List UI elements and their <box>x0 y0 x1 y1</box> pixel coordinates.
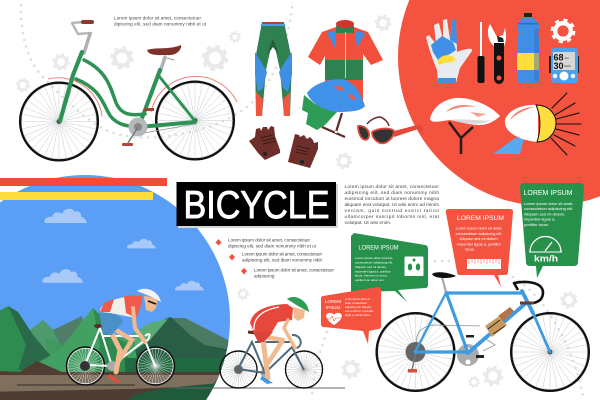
callout: small red heart: LOREM <box>325 299 341 304</box>
text: top block: dipiscing elit, sed diam nonummy nibh et ut <box>114 22 207 26</box>
callout: far right green speed: Lorem ipsum dolor sit amet, <box>524 201 573 206</box>
icon: cycling jersey <box>308 20 383 100</box>
callout: middle green weight: LOREM IPSUM <box>358 246 398 252</box>
ground lines <box>17 385 345 388</box>
callout: middle green weight: consectetuer adipiscing elit. <box>355 260 393 264</box>
text: main paragraph: Lorem ipsum dolor sit amet, consectetuer <box>344 184 439 190</box>
icon: bike computer <box>549 48 579 83</box>
text: main paragraph <box>344 184 440 226</box>
icon: glove with yellow palm <box>426 19 472 83</box>
callout: middle green weight: lacus. Aenean eu tortor, <box>355 274 388 278</box>
panel: landscape scene <box>0 170 240 400</box>
mountains <box>0 306 240 400</box>
callout: far right green speed: consectetuer adipiscing elit. <box>524 206 573 211</box>
callout: small red heart: ligula a, porttitor lacus. <box>345 313 371 317</box>
callout: middle red length <box>446 209 513 287</box>
icon: water bottle <box>517 13 539 83</box>
bullet list: Lorem ipsum dolor sit amet, consectetuer <box>228 238 310 242</box>
callout: middle red length: consectetuer adipiscing elit. <box>456 232 502 236</box>
icon: bike lamp <box>493 93 581 155</box>
green bicycle <box>20 22 237 160</box>
text: main paragraph: adipiscing elit, sed diam nonummy nibh <box>344 190 439 196</box>
text: main paragraph: volutpat. Ut wisi enim. <box>344 220 391 226</box>
callout: middle red length: imperdiet ligula a, porttitor <box>457 242 502 246</box>
colour bars <box>0 178 167 200</box>
blue bicycle <box>377 272 589 391</box>
callout: small red heart: adipiscing elit. Aliquam <box>345 305 371 309</box>
callout: small red heart: sed mi dictum, Imperdiet <box>345 309 374 313</box>
icon: bike computer: 68 <box>554 52 564 62</box>
callout: middle green weight: eleifend ac dolor non. <box>355 278 385 282</box>
bullet list: adipiscing elit, sed diam nonummy nibh <box>242 258 322 262</box>
icon: fingerless gloves <box>249 126 318 168</box>
text: main paragraph: ullamcorper suscipit lobortis nisl, erat <box>344 214 440 220</box>
icon: white helmet <box>430 98 500 154</box>
text: main paragraph: euismod tincidunt ut laoreet dolore magna <box>344 196 439 202</box>
callout: small red heart: Lorem ipsum dolor sit <box>345 297 370 301</box>
cyclist in landscape <box>66 289 174 385</box>
text: main paragraph: aliquam erat volutpat. Ut wisi enim ad minim <box>344 202 439 208</box>
bullet list: dipiscing elit, sed diam nonummy nibh et ut <box>228 244 317 248</box>
callout: far right green speed: km/h <box>534 254 558 264</box>
icon: bike computer: 30 <box>554 61 564 71</box>
text: main paragraph: veniam, quis nostrud exerci tation <box>344 208 439 214</box>
callout: far right green speed: imperdiet ligula a, <box>524 216 555 222</box>
icon: blue helmet <box>302 79 365 137</box>
cyclist on white <box>220 297 322 388</box>
icon: wrench <box>488 24 506 84</box>
icon: bike computer: km/h <box>564 64 571 68</box>
callout: small red heart <box>321 287 381 344</box>
callout: far right green speed: Aliquam sed mi dictum, <box>524 212 565 216</box>
callout: middle green weight: Aliquam sed mi dictum, <box>355 265 387 269</box>
bullet list: Lorem ipsum dolor sit amet, consectetuer <box>254 268 334 272</box>
bullet list <box>216 238 334 278</box>
callout: middle green weight: imperdiet ligula a, porttitor <box>355 270 391 274</box>
icon: sunglasses <box>358 117 424 143</box>
text: top block: Lorem ipsum dolor sit amet, consectetuer <box>114 16 201 20</box>
callout: small red heart: amet, consectetuer <box>345 301 367 305</box>
bullet list: Lorem ipsum dolor sit amet, consectetuer <box>242 252 322 256</box>
panel: red circle <box>398 0 600 206</box>
callout: middle red length: Aliquam sed mi dictum, <box>459 237 499 241</box>
callout: far right green speed: porttitor lacus. <box>524 222 549 227</box>
callout: small red heart: IPSUM <box>326 305 340 310</box>
icon: screwdriver <box>478 22 484 83</box>
callout: middle green weight <box>351 233 428 302</box>
callout: middle red length: LOREM IPSUM <box>457 215 504 222</box>
bullet list: adipiscing <box>254 274 275 278</box>
callout: far right green speed: LOREM IPSUM <box>524 188 572 197</box>
callout: middle red length: lacus. <box>465 248 475 252</box>
text: top block <box>114 16 207 26</box>
clouds <box>42 209 204 290</box>
callout: middle red length: Lorem ipsum dolor sit amet, <box>456 226 502 230</box>
callout: middle green weight: Lorem ipsum dolor sit amet, <box>355 256 393 260</box>
icon: cycling tights <box>255 22 292 116</box>
icon: white gear <box>552 20 574 42</box>
title: BICYCLE <box>184 184 330 227</box>
icon: bike computer: km <box>565 56 569 60</box>
callout: far right green speed <box>520 183 584 278</box>
